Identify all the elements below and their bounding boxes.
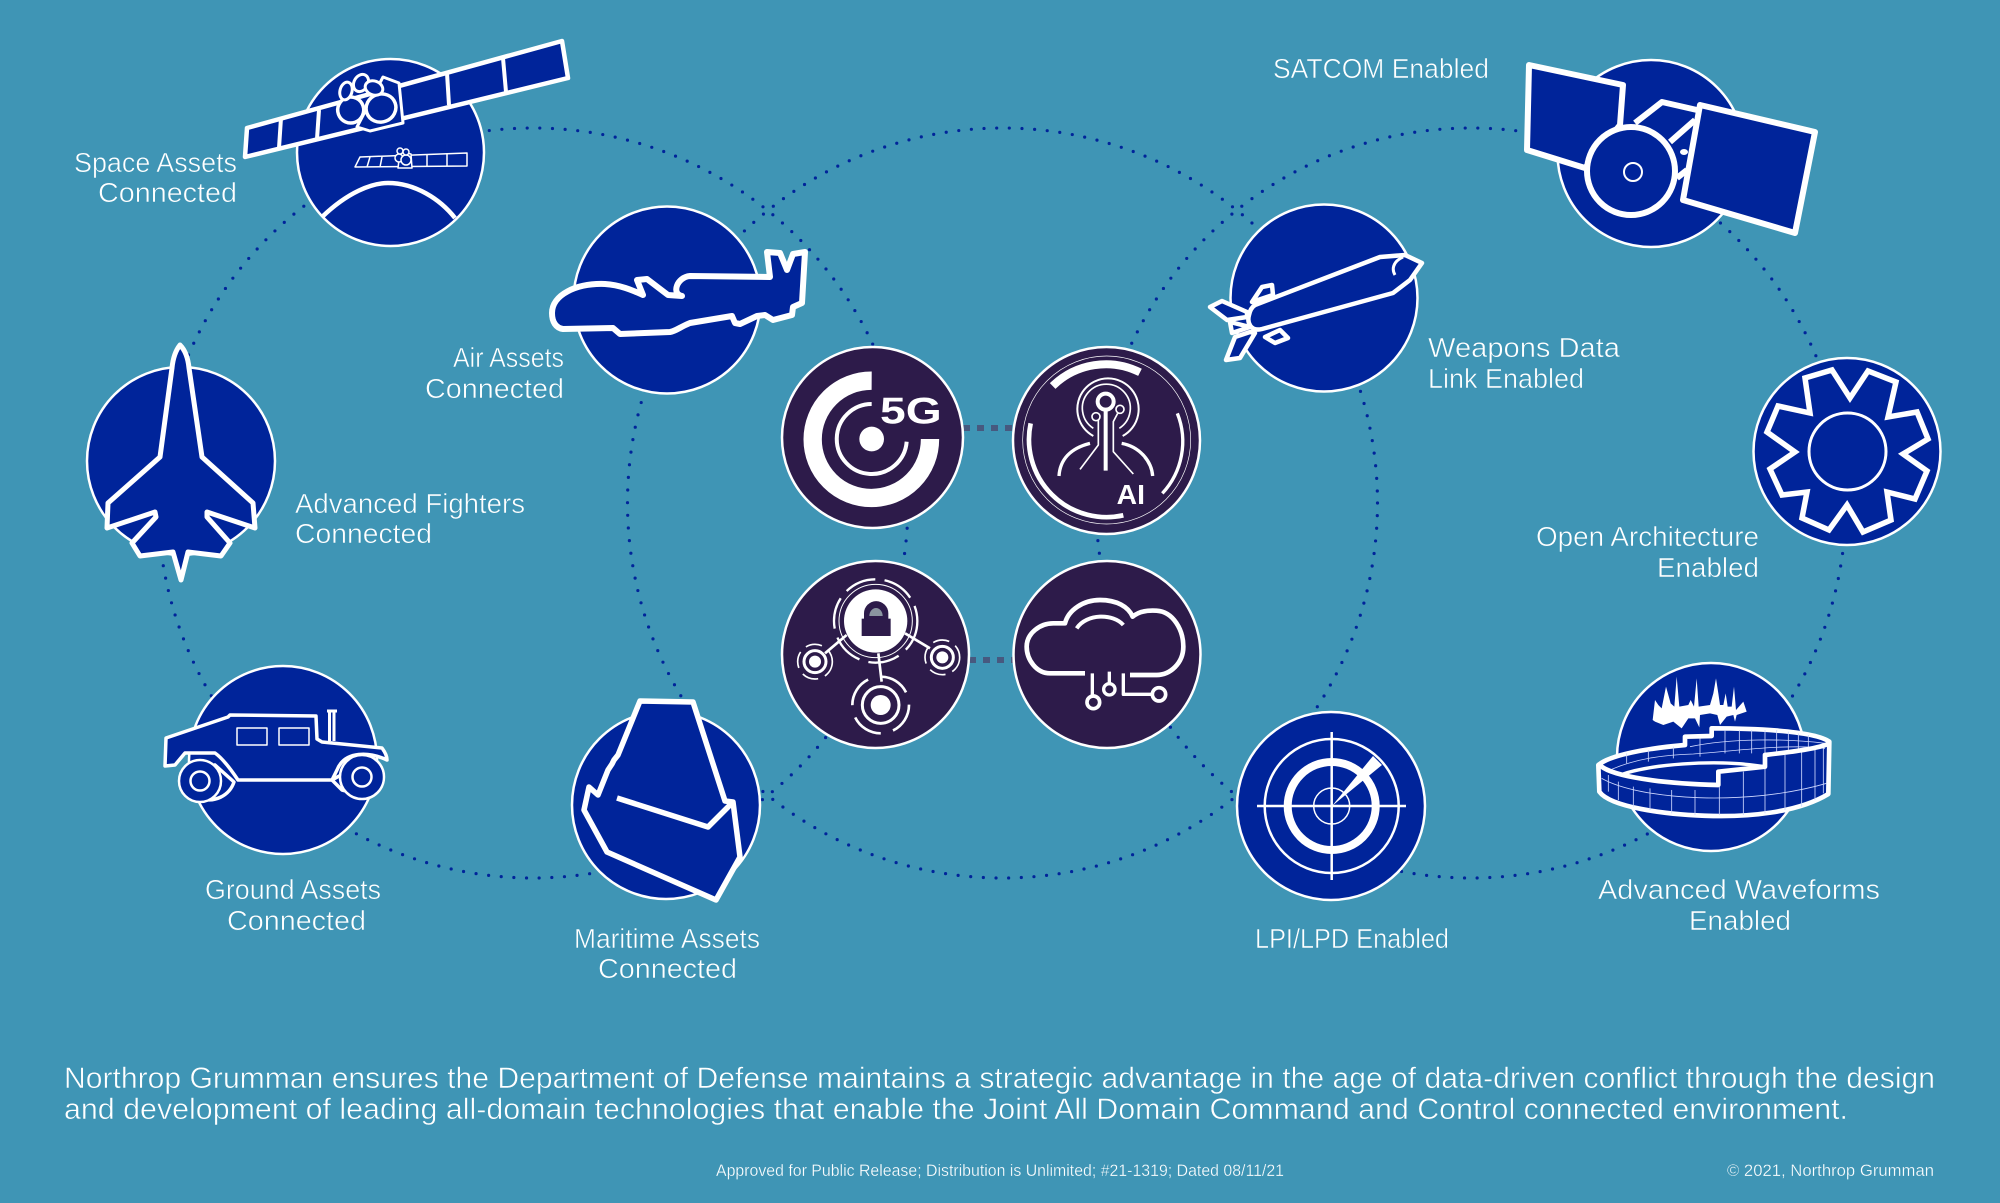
- copyright: © 2021, Northrop Grumman: [1727, 1161, 1934, 1180]
- label: open architecture: Enabled: [1657, 552, 1759, 583]
- core technology: 5G: [782, 347, 963, 528]
- icon: satcom satellite: [1527, 60, 1815, 247]
- label: ground assets: Ground Assets: [205, 874, 381, 905]
- label: maritime assets: Maritime Assets: [574, 923, 760, 954]
- summary statement: [64, 1062, 1935, 1126]
- label: air assets: Air Assets: [453, 342, 564, 373]
- label: advanced fighters: Advanced Fighters: [295, 488, 525, 519]
- dashed connectors between core technologies: [963, 428, 1013, 660]
- label: LPI/LPD enabled: LPI/LPD Enabled: [1255, 923, 1449, 954]
- label: advanced fighters: [295, 488, 525, 549]
- label: space assets: Connected: [98, 177, 237, 208]
- label: advanced waveforms: Advanced Waveforms: [1598, 874, 1880, 905]
- label: ground assets: Connected: [227, 905, 366, 936]
- label: weapons data link: [1428, 332, 1620, 394]
- icon: LPI/LPD radar: [1237, 712, 1425, 900]
- core technology: AI: AI: [1117, 479, 1145, 510]
- label: satcom enabled: SATCOM Enabled: [1273, 53, 1489, 84]
- label: open architecture: Open Architecture: [1536, 521, 1759, 552]
- label: maritime assets: Connected: [598, 953, 737, 984]
- dotted network rings: [158, 128, 1846, 878]
- label: space assets: [74, 147, 237, 208]
- summary statement: Northrop Grumman ensures the Department of Defense maintains a strategic advantage in the age of data-driven conflict through the design: [64, 1062, 1935, 1095]
- icon: air asset drone: [552, 206, 805, 394]
- icon: open architecture gear: [1754, 358, 1940, 545]
- core technology: secure network lock: [782, 561, 969, 748]
- label: advanced waveforms: Enabled: [1689, 905, 1791, 936]
- label: weapons data link: Link Enabled: [1428, 363, 1584, 394]
- summary statement: and development of leading all-domain technologies that enable the Joint All Domain Command and Control connected environment.: [64, 1093, 1848, 1126]
- label: weapons data link: Weapons Data: [1428, 332, 1620, 363]
- label: ground assets: [205, 874, 381, 936]
- core technology: 5G: 5G: [880, 389, 942, 431]
- icon: advanced fighter jet: [87, 345, 275, 580]
- release notice: Approved for Public Release; Distribution is Unlimited; #21-1319; Dated 08/11/21: [716, 1161, 1284, 1180]
- label: advanced waveforms: [1598, 874, 1880, 936]
- label: open architecture: [1536, 521, 1759, 583]
- icon: weapon missile: [1210, 204, 1422, 392]
- label: air assets: [425, 342, 564, 404]
- icon: maritime vessel: [572, 701, 760, 900]
- core technology: cloud: [1014, 561, 1200, 748]
- label: advanced fighters: Connected: [295, 518, 432, 549]
- core technology: AI: [1013, 347, 1200, 534]
- label: air assets: Connected: [425, 373, 564, 404]
- label: maritime assets: [574, 923, 760, 984]
- icon: ground vehicle: [165, 666, 387, 854]
- icon: space assets satellite: [245, 41, 568, 246]
- label: space assets: Space Assets: [74, 147, 237, 178]
- icon: advanced waveforms band: [1598, 663, 1829, 851]
